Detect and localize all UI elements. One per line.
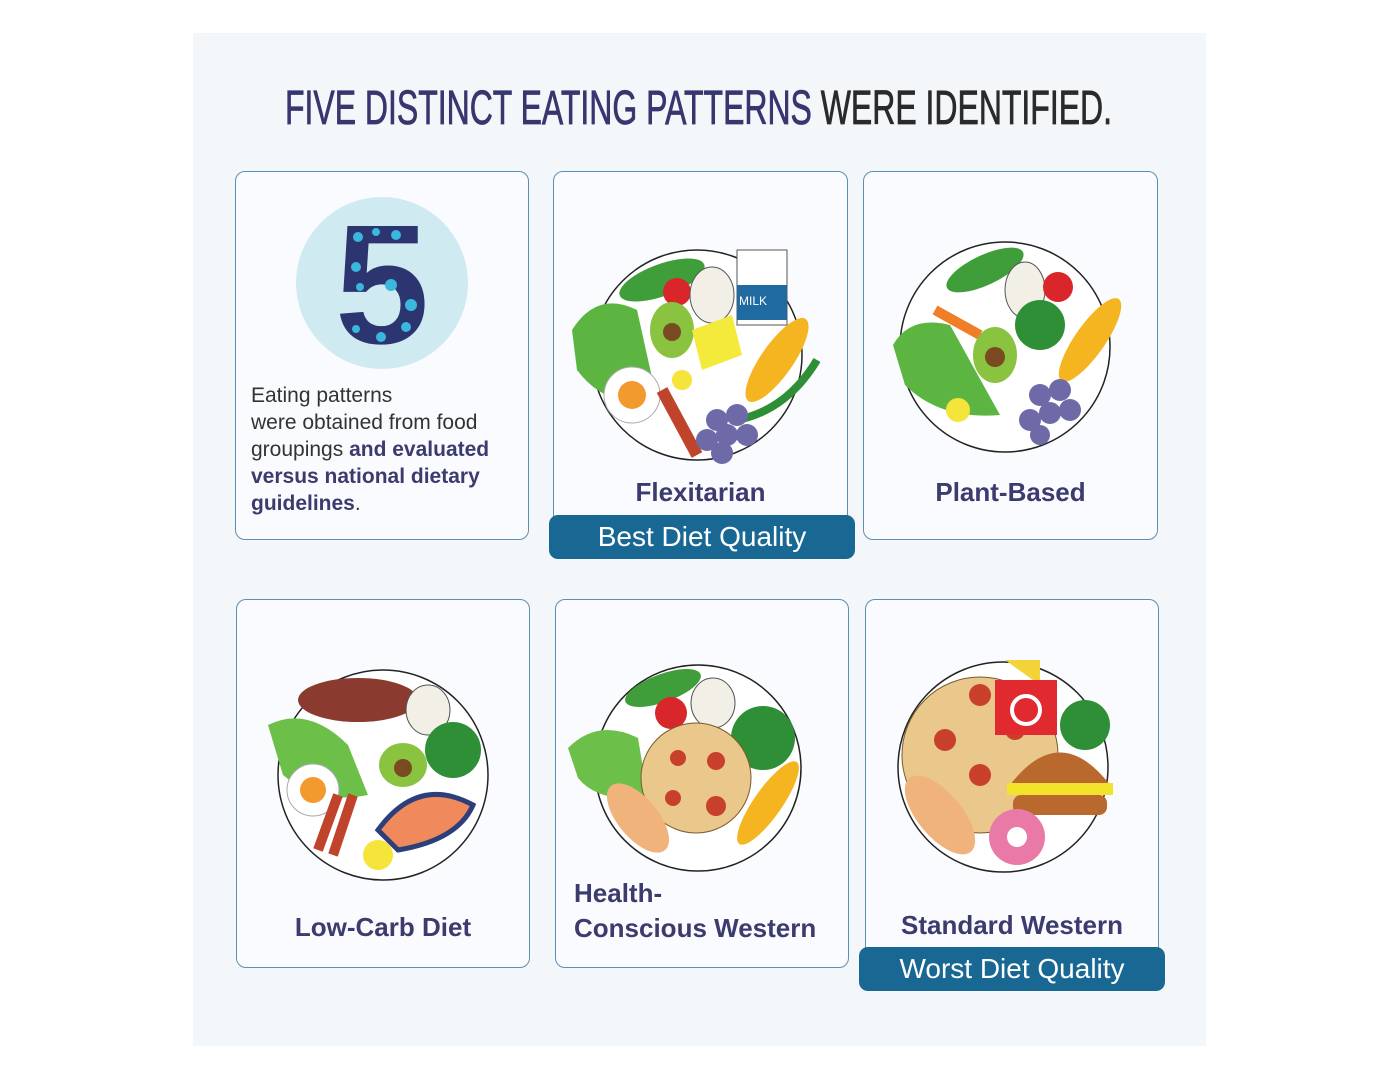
panel: intro five patterns	[235, 171, 529, 540]
label: low-carb: Low-Carb Diet	[295, 912, 471, 942]
label: standard western: Standard Western	[901, 910, 1123, 940]
plate: health-conscious western	[568, 664, 802, 872]
label: flexitarian: Flexitarian	[635, 477, 766, 507]
plate: flexitarian: MILK	[739, 294, 767, 308]
badge: worst diet quality: Worst Diet Quality	[899, 953, 1125, 984]
label: health-conscious western	[574, 878, 816, 943]
panel: low-carb	[236, 599, 530, 968]
badge: best diet quality: Best Diet Quality	[598, 521, 806, 552]
plate: flexitarian	[572, 249, 820, 464]
plate: plant-based	[893, 241, 1122, 453]
panel: standard western	[865, 599, 1159, 968]
label: health-conscious western: Health-	[574, 878, 662, 908]
plate: standard western	[897, 660, 1113, 873]
badge: worst diet quality	[859, 947, 1165, 991]
plate: low-carb	[268, 669, 489, 881]
label: plant-based: Plant-Based	[935, 477, 1086, 507]
text block: description: Eating patterns	[251, 384, 392, 407]
background panel	[193, 33, 1206, 1046]
badge: best diet quality	[549, 515, 855, 559]
panel: health-conscious western	[555, 599, 849, 968]
icon: number 5 circle	[296, 197, 468, 369]
panel: flexitarian	[553, 171, 848, 540]
label: health-conscious western: Conscious Western	[574, 913, 816, 943]
text block: description: were obtained from food groupings and evaluated versus national dietary guidelines.	[251, 411, 489, 515]
panel: plant-based	[863, 171, 1158, 540]
